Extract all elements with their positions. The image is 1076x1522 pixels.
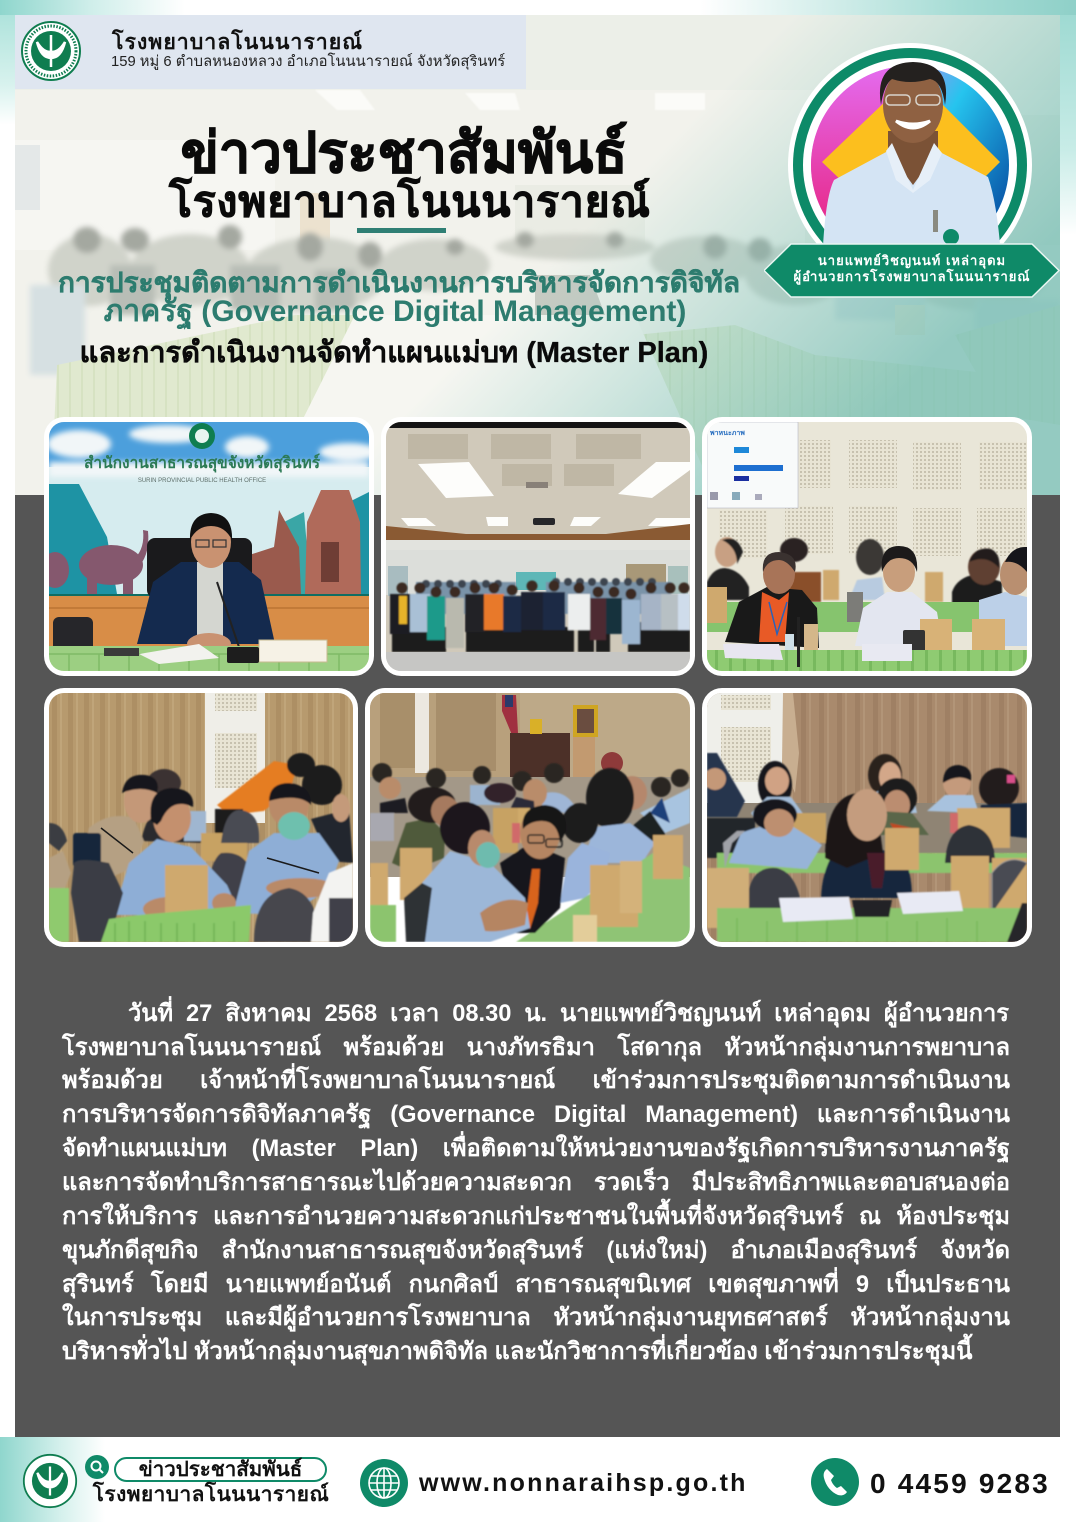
hospital address: 159 หมู่ 6 ตำบลหนองหลวง อำเภอโนนนารายณ์ จังหวัดสุรินทร์ (111, 54, 505, 70)
panel: faded meeting room photo background (15, 15, 1060, 495)
body text: การบริหารจัดการดิจิทัลภาครัฐ (Governance Digital Management) และการดำเนินงาน (62, 1102, 1010, 1128)
body text: ในการประชุม และมีผู้อำนวยการโรงพยาบาล หัวหน้ากลุ่มงานยุทธศาสตร์ หัวหน้ากลุ่มงาน (62, 1305, 1010, 1331)
photo: woman in navy jacket smiling at the table (702, 688, 1032, 947)
photo: seated participants with presentation screen (702, 417, 1032, 676)
body text: พร้อมด้วย เจ้าหน้าที่โรงพยาบาลโนนนารายณ์ เข้าร่วมการประชุมติดตามการดำเนินงาน (62, 1068, 1010, 1094)
icon: search (85, 1455, 109, 1479)
body text: วันที่ 27 สิงหาคม 2568 เวลา 08.30 น. นายแพทย์วิชญนนท์ เหล่าอุดม ผู้อำนวยการ (128, 1001, 1009, 1027)
body text: โรงพยาบาลโนนนารายณ์ พร้อมด้วย นางภัทรธิมา โสดากุล หัวหน้ากลุ่มงานการพยาบาล (62, 1035, 1010, 1061)
hospital name: โรงพยาบาลโนนนารายณ์ (112, 30, 363, 54)
body text: การให้บริการ และการอำนวยความสะดวกแก่ประชาชนในพื้นที่จังหวัดสุรินทร์ ณ ห้องประชุม (62, 1204, 1010, 1230)
director position: ผู้อำนวยการโรงพยาบาลโนนนารายณ์ (794, 269, 1030, 284)
photo: provincial health office chairperson: SURIN PROVINCIAL PUBLIC HEALTH OFFICE (138, 478, 266, 484)
photo: group photo in the meeting hall (381, 417, 695, 676)
banner: director name (764, 243, 1060, 298)
body text: และการจัดทำบริการสาธารณะไปด้วยความสะดวก รวดเร็ว มีประสิทธิภาพและตอบสนองต่อ (62, 1170, 1010, 1196)
icon: ministry of public health logo (21, 21, 81, 81)
director name: นายแพทย์วิชญนนท์ เหล่าอุดม (818, 253, 1006, 268)
footer: hospital logo and tagline (22, 1454, 329, 1508)
photo: two men talking at the table (365, 688, 695, 947)
phone number: 0 4459 9283 (870, 1468, 1050, 1499)
icon: globe (360, 1459, 408, 1507)
headline line 3: และการดำเนินงานจัดทำแผนแม่บท (Master Plan) (80, 337, 708, 369)
photo: seated participants with presentation screen: พาหนะภาพ (710, 430, 745, 437)
banner shape (764, 243, 1060, 298)
panel: dark body background (15, 495, 1060, 1437)
portrait: hospital director (788, 43, 1032, 244)
body text: บริหารทั่วไป หัวหน้ากลุ่มงานสุขภาพดิจิทัล และนักวิชาการที่เกี่ยวข้อง เข้าร่วมการประชุมนี้ (62, 1339, 972, 1365)
body text: ขุนภักดีสุขกิจ สำนักงานสาธารณสุขจังหวัดสุรินทร์ (แห่งใหม่) อำเภอเมืองสุรินทร์ จังหวัด (62, 1238, 1010, 1264)
icon: phone (811, 1458, 859, 1506)
body text: จัดทำแผนแม่บท (Master Plan) เพื่อติดตามให้หน่วยงานของรัฐเกิดการบริหารงานภาครัฐ (62, 1136, 1010, 1162)
header: hospital identity (21, 21, 505, 81)
title: ข่าวประชาสัมพันธ์ (181, 121, 627, 184)
tag pill: ข่าวประชาสัมพันธ์ (139, 1458, 302, 1481)
title underline (357, 228, 446, 233)
footer hospital name: โรงพยาบาลโนนนารายณ์ (93, 1483, 329, 1506)
photo: participants with orange shirt staff behind (44, 688, 358, 947)
body text: สุรินทร์ โดยมี นายแพทย์อนันต์ กนกศิลป์ สาธารณสุขนิเทศ เขตสุขภาพที่ 9 เป็นประธาน (62, 1272, 1010, 1298)
headline line 2: ภาครัฐ (Governance Digital Management) (104, 295, 686, 328)
subtitle: hospital name: โรงพยาบาลโนนนารายณ์ (169, 178, 651, 225)
photo sign text: สำนักงานสาธารณสุขจังหวัดสุรินทร์ (84, 453, 320, 473)
website: www.nonnaraihsp.go.th (419, 1469, 748, 1497)
icon: footer logo (22, 1454, 78, 1508)
photo: provincial health office chairperson (44, 417, 374, 676)
headline line 1: การประชุมติดตามการดำเนินงานการบริหารจัดการดิจิทัล (58, 267, 740, 298)
body text (62, 996, 1010, 1366)
